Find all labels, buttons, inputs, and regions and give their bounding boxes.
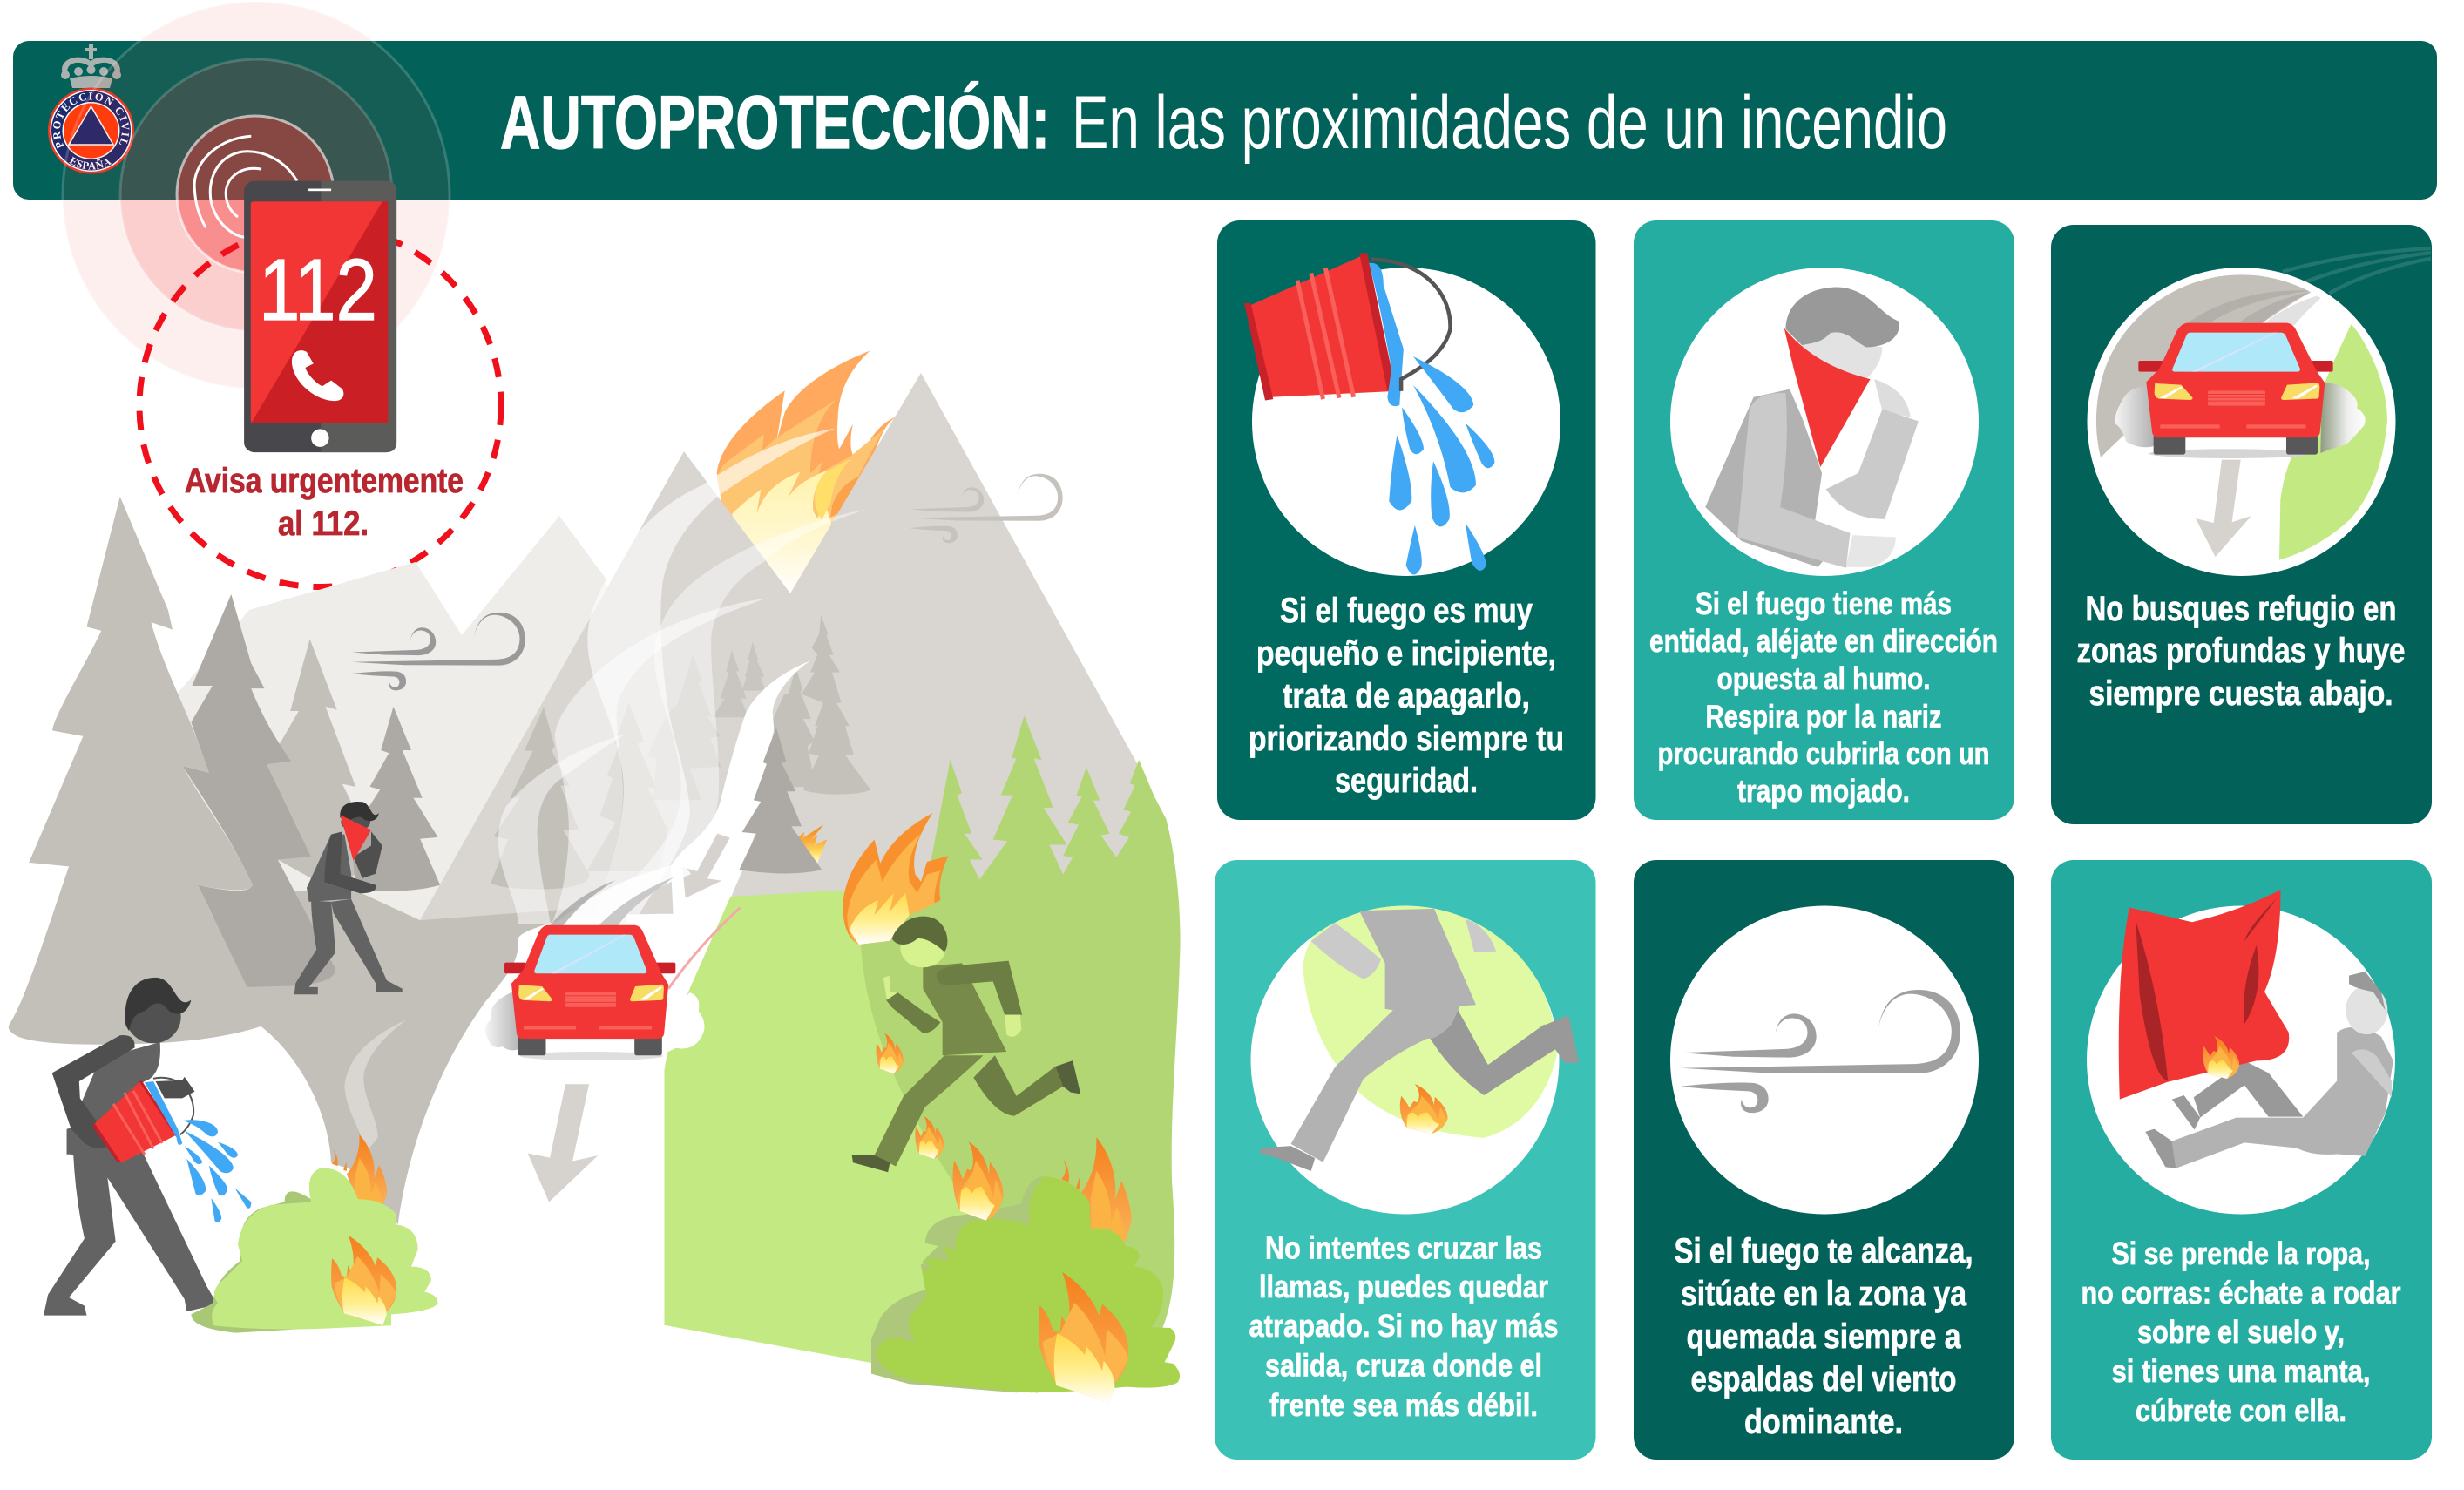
signal rings	[63, 2, 450, 389]
car trail	[668, 908, 741, 1052]
large mountains	[420, 373, 1141, 920]
title: AUTOPROTECCIÓN:	[500, 81, 1050, 165]
title: En las proximidades de un incendio	[1072, 81, 1947, 165]
right bush with flames	[871, 1137, 1180, 1403]
signal arcs	[194, 136, 297, 237]
icon: person with blanket	[2119, 890, 2393, 1168]
text: entidad, aléjate en dirección	[1649, 623, 1998, 659]
call to action text: al 112.	[278, 505, 369, 543]
panel: huir cuesta abajo	[2051, 225, 2432, 824]
text: cúbrete con ella.	[2136, 1392, 2346, 1428]
text	[1249, 592, 1564, 800]
text: Respira por la nariz	[1706, 699, 1941, 734]
grey ground	[178, 891, 592, 1224]
text: No busques refugio en	[2086, 590, 2396, 628]
person with bucket	[44, 978, 251, 1316]
text: Si se prende la ropa,	[2112, 1236, 2370, 1271]
text: trapo mojado.	[1737, 773, 1910, 809]
light mountains	[174, 516, 627, 924]
title banner	[13, 41, 2437, 200]
tree 1	[9, 497, 261, 1045]
text: priorizando siempre tu	[1249, 720, 1564, 758]
left bush	[191, 1168, 438, 1333]
tree 4	[351, 707, 440, 891]
car motion streaks	[549, 863, 691, 930]
flame on runner	[1400, 1084, 1448, 1134]
icon: person with wet cloth	[1705, 288, 1919, 568]
text: opuesta al humo.	[1716, 660, 1931, 696]
text: Si el fuego es muy	[1280, 592, 1533, 630]
text: quemada siempre a	[1687, 1317, 1961, 1356]
text: procurando cubrirla con un	[1657, 735, 1990, 771]
call to action text: Avisa urgentemente	[185, 462, 464, 500]
phone	[244, 181, 396, 452]
logo: Protección Civil España: ESPAÑA	[69, 157, 112, 170]
red car	[504, 925, 675, 1055]
icon: running person	[1260, 906, 1579, 1171]
text: llamas, puedes quedar	[1259, 1269, 1548, 1304]
text	[2081, 1236, 2401, 1428]
icon: bucket and water	[1244, 254, 1494, 575]
car smoke	[485, 992, 522, 1050]
text	[1249, 1230, 1558, 1423]
panel: zona quemada y viento	[1634, 860, 2014, 1460]
panel: rodar por el suelo y cubrirse	[2051, 860, 2432, 1460]
flame on left bush	[331, 1236, 396, 1325]
wind right	[910, 474, 1063, 543]
phone number 112: 112	[259, 241, 377, 339]
tree 2	[182, 594, 335, 987]
text: salida, cruza donde el	[1265, 1347, 1542, 1384]
panel: no cruzar las llamas	[1215, 860, 1596, 1460]
text: frente sea más débil.	[1269, 1387, 1538, 1423]
flame on blanket	[2203, 1036, 2239, 1079]
smoke	[498, 429, 865, 924]
text: pequeño e incipiente,	[1256, 634, 1556, 673]
green hill	[664, 715, 1181, 1393]
text: si tienes una manta,	[2112, 1353, 2370, 1389]
text	[1675, 1232, 1973, 1441]
fire on mountain peak	[717, 351, 896, 595]
text: Si el fuego te alcanza,	[1675, 1232, 1973, 1270]
icon: handset	[292, 350, 343, 401]
smoke column	[344, 1019, 407, 1155]
text: No intentes cruzar las	[1265, 1230, 1542, 1265]
wind left	[352, 613, 525, 690]
dashed circle	[139, 225, 501, 587]
text: sitúate en la zona ya	[1681, 1275, 1967, 1313]
panel: alejarse del humo	[1634, 220, 2014, 820]
text	[2077, 590, 2405, 713]
text: sobre el suelo y,	[2137, 1314, 2345, 1350]
text: espaldas del viento	[1690, 1360, 1957, 1399]
text: no corras: échate a rodar	[2081, 1275, 2401, 1311]
small flame by runner foot	[915, 1116, 944, 1159]
panel: apagar fuego pequeño	[1217, 220, 1596, 820]
runner with flames	[843, 813, 1080, 1172]
flame behind left bush	[332, 1134, 387, 1208]
text: trata de apagarlo,	[1283, 677, 1530, 715]
tree 3	[267, 639, 378, 891]
title	[500, 81, 1947, 165]
landscape illustration	[9, 351, 1181, 1403]
text: Si el fuego tiene más	[1696, 586, 1952, 621]
text: siempre cuesta abajo.	[2089, 674, 2393, 713]
mountain trees and road	[491, 615, 870, 930]
runner figure	[852, 917, 1080, 1172]
icon: car on slope	[2096, 248, 2431, 560]
call to action text	[185, 462, 464, 543]
logo: Protección Civil España	[48, 44, 134, 174]
person with mask	[294, 802, 403, 994]
small flame by runner hand	[876, 1033, 904, 1073]
text	[1649, 586, 1998, 809]
text: zonas profundas y huye	[2077, 632, 2405, 670]
icon: wind	[1681, 990, 1960, 1113]
road arrow	[528, 1084, 598, 1202]
logo: Protección Civil España: PROTECCION CIVIL	[53, 92, 129, 150]
car shadow	[520, 1052, 663, 1060]
fire near head	[843, 813, 948, 945]
text: seguridad.	[1335, 762, 1478, 800]
text: atrapado. Si no hay más	[1249, 1308, 1558, 1344]
text: dominante.	[1744, 1403, 1903, 1441]
